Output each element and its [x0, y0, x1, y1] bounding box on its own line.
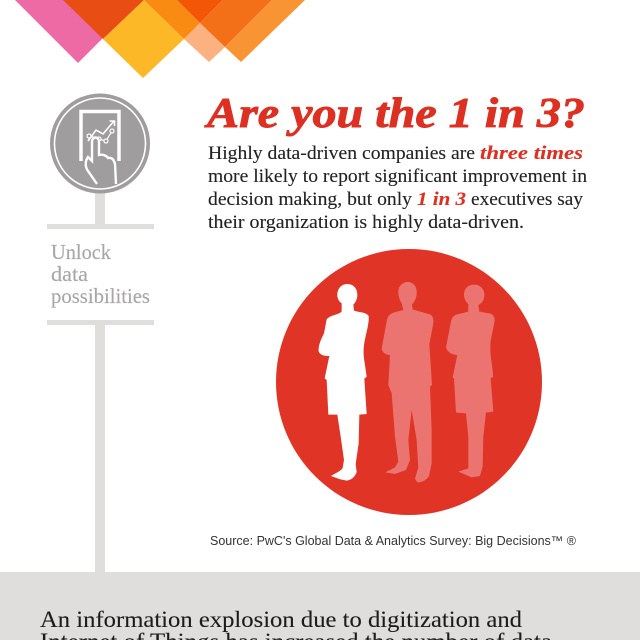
silhouette: man — [382, 282, 433, 482]
body paragraph — [208, 143, 588, 233]
body paragraph: executives say — [471, 189, 584, 210]
title: Are you the 1 in 3? — [204, 91, 585, 137]
body paragraph: three times — [480, 143, 583, 164]
body paragraph: their organization is highly data-driven. — [208, 212, 524, 233]
grey footer band — [0, 572, 640, 640]
sidebar label: Unlock — [51, 240, 111, 264]
body paragraph: decision making, but only — [208, 189, 413, 210]
decorative diamonds header — [15, 0, 305, 78]
footer text: An information explosion due to digitization and — [40, 607, 522, 633]
timeline connector — [47, 190, 154, 572]
source note: Source: PwC's Global Data & Analytics Survey: Big Decisions™ ® — [210, 534, 577, 548]
sidebar label: data — [51, 262, 89, 286]
red circle with three silhouettes — [276, 249, 542, 515]
body paragraph: 1 in 3 — [417, 189, 466, 210]
icon: hand touching tablet — [50, 94, 150, 194]
silhouette: highlighted woman — [319, 284, 369, 481]
body paragraph: more likely to report significant improvement in — [208, 166, 588, 187]
silhouette: woman — [446, 285, 495, 477]
sidebar label: possibilities — [51, 284, 150, 308]
body paragraph: Highly data-driven companies are — [208, 143, 475, 164]
